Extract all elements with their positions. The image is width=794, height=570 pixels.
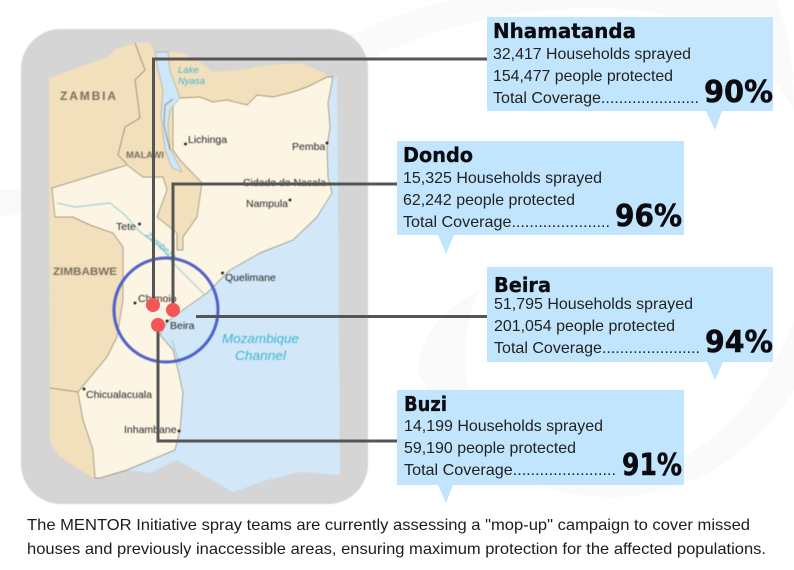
caption text: houses and previously inaccessible areas, ensuring maximum protection for the affected populations. xyxy=(27,541,766,558)
callout: Nhamatanda: 90% xyxy=(704,75,773,110)
grey map backing xyxy=(21,29,368,504)
callout: Buzi: 14,199 Households sprayed xyxy=(404,418,603,435)
callout: Dondo: 96% xyxy=(615,199,682,234)
city labels and dots: Cidade de Nacala xyxy=(243,177,326,189)
water labels: Lake xyxy=(178,65,199,76)
Mozambique land xyxy=(52,77,333,478)
city labels and dots: Chimoio xyxy=(138,293,177,305)
country labels xyxy=(53,89,164,278)
neighbouring countries xyxy=(49,43,328,478)
water labels: Zambeze xyxy=(143,229,179,262)
callout: Nhamatanda: 32,417 Households sprayed xyxy=(493,46,691,63)
caption text: The MENTOR Initiative spray teams are currently assessing a "mop-up" campaign to cover missed xyxy=(27,517,750,534)
city labels and dots: Beira xyxy=(170,320,195,332)
country labels: MALAWI xyxy=(126,150,164,161)
callout: Buzi: Buzi xyxy=(404,392,447,416)
callout: Buzi: Total Coverage....................... xyxy=(404,462,616,479)
callout: Buzi: 91% xyxy=(622,448,682,483)
water labels: Mozambique xyxy=(222,332,299,346)
callout: Dondo: Total Coverage...................... xyxy=(403,214,610,231)
callout: Beira: 201,054 people protected xyxy=(494,318,675,335)
callout: Nhamatanda xyxy=(487,17,773,130)
callout: Buzi: 59,190 people protected xyxy=(404,440,576,457)
country labels: ZAMBIA xyxy=(60,89,116,103)
country labels: ZIMBABWE xyxy=(53,266,117,278)
caption text xyxy=(27,517,766,558)
callout: Beira: 94% xyxy=(705,325,773,360)
national borders xyxy=(50,43,173,392)
callout: Beira: 51,795 Households sprayed xyxy=(494,296,693,313)
highlight circle around the sprayed districts xyxy=(114,258,218,362)
leader lines from districts to callouts xyxy=(154,59,488,441)
city labels and dots: Lichinga xyxy=(188,134,227,146)
water labels: Channel xyxy=(235,349,287,363)
city labels and dots: Inhambane xyxy=(124,424,177,436)
city labels and dots: Quelimane xyxy=(225,272,276,284)
callout: Nhamatanda: 154,477 people protected xyxy=(493,68,673,85)
water labels: Nyasa xyxy=(178,76,205,87)
city labels and dots: Tete xyxy=(116,221,136,233)
callout: Dondo: Dondo xyxy=(403,143,473,167)
callout: Dondo: 62,242 people protected xyxy=(403,192,575,209)
city labels and dots: Nampula xyxy=(246,198,288,210)
sea xyxy=(128,77,340,492)
callout: Dondo xyxy=(397,141,684,254)
district markers xyxy=(146,298,180,332)
city labels and dots xyxy=(83,134,329,436)
callout: Buzi xyxy=(397,390,684,503)
callout: Beira: Beira xyxy=(494,273,551,297)
callout: Dondo: 15,325 Households sprayed xyxy=(403,170,602,187)
Lake Nyasa xyxy=(155,52,182,172)
city labels and dots: Pemba xyxy=(292,141,325,153)
callout: Beira xyxy=(487,267,773,380)
Zambezi river xyxy=(57,203,205,365)
callout: Beira: Total Coverage...................... xyxy=(494,340,700,357)
callout: Nhamatanda: Nhamatanda xyxy=(493,19,636,43)
water labels xyxy=(143,65,299,363)
city labels and dots: Chicualacuala xyxy=(86,389,152,401)
panel: map of central Mozambique xyxy=(21,29,368,504)
callout: Nhamatanda: Total Coverage...................... xyxy=(493,90,699,107)
